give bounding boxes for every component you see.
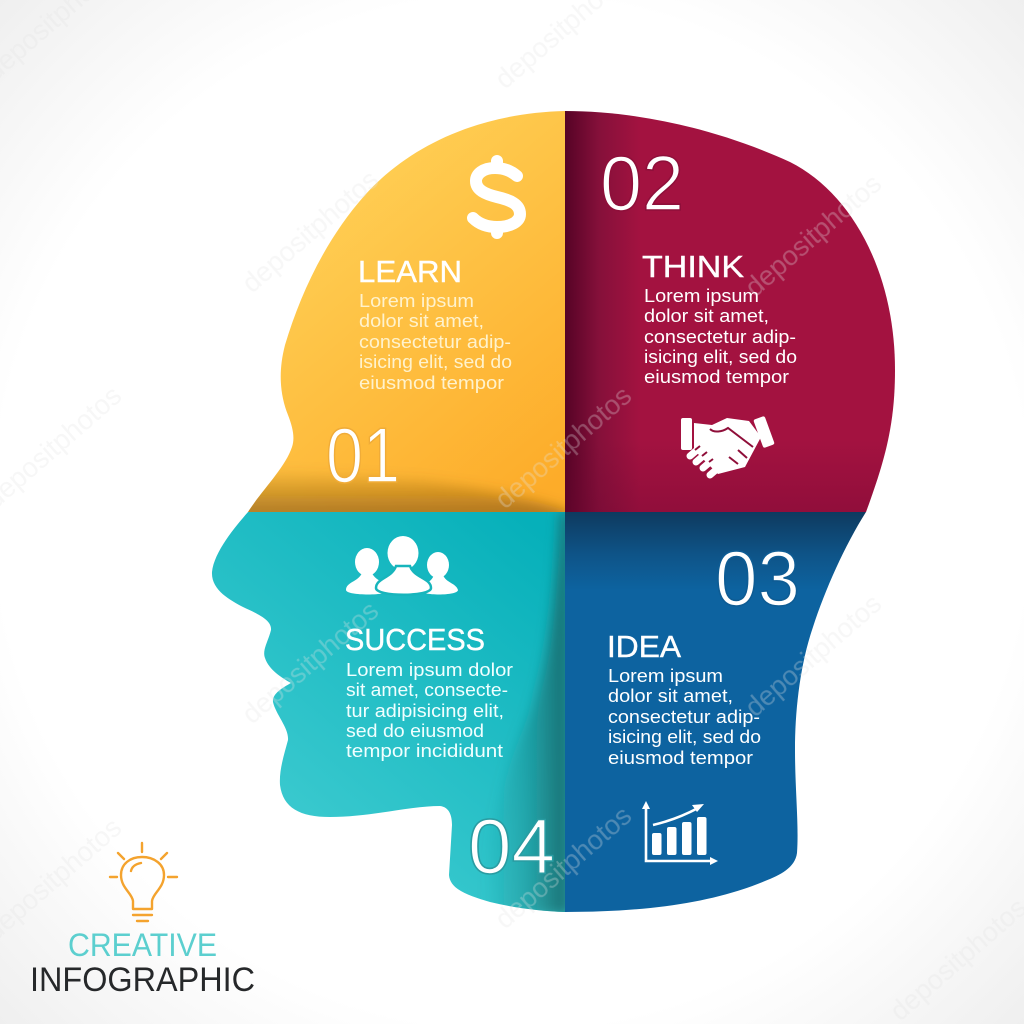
body text: learn: dolor sit amet, xyxy=(359,311,484,331)
heading: success: SUCCESS xyxy=(345,622,485,657)
yellow fill xyxy=(230,100,565,512)
crimson bottom shadow xyxy=(598,472,880,512)
number 02: 02 xyxy=(600,139,684,227)
section 04: success xyxy=(345,536,555,890)
teal fill xyxy=(205,512,565,914)
body text: learn: Lorem ipsum xyxy=(359,291,474,311)
body text: idea: eiusmod tempor xyxy=(608,748,753,768)
section 02: think xyxy=(600,139,797,475)
watermark 6: depositphotos xyxy=(739,588,887,723)
body text: success: tempor incididunt xyxy=(346,741,503,761)
watermark 4: depositphotos xyxy=(236,595,384,730)
watermark 2: depositphotos xyxy=(489,380,637,515)
number 03: 03 xyxy=(715,534,800,622)
text: creative: CREATIVE xyxy=(68,927,217,963)
icon: growth chart xyxy=(642,801,718,865)
body text: think: consectetur adip- xyxy=(644,327,796,347)
teal right shadow xyxy=(497,512,565,912)
heading: think: THINK xyxy=(642,249,744,284)
watermark 5: depositphotos xyxy=(489,800,637,935)
body text: think xyxy=(644,286,797,387)
body text: think: dolor sit amet, xyxy=(644,306,769,326)
body text: think: eiusmod tempor xyxy=(644,367,789,387)
icon: handshake xyxy=(681,416,775,475)
icon: group of people xyxy=(346,536,458,595)
body text: learn: consectetur adip- xyxy=(359,332,511,352)
heading: learn: LEARN xyxy=(358,254,462,289)
head infographic xyxy=(205,100,905,915)
icon: dollar sign xyxy=(473,161,520,233)
body text: think: isicing elit, sed do xyxy=(644,347,797,367)
body text: idea xyxy=(608,666,761,768)
body text: learn: eiusmod tempor xyxy=(359,373,504,393)
body text: success: Lorem ipsum dolor xyxy=(346,660,513,680)
body text: learn: isicing elit, sed do xyxy=(359,352,512,372)
body text: think: Lorem ipsum xyxy=(644,286,759,306)
yellow bottom shadow xyxy=(248,472,565,512)
crimson fill xyxy=(565,100,905,512)
watermark 3: depositphotos xyxy=(739,168,887,303)
body text: idea: isicing elit, sed do xyxy=(608,727,761,747)
body text: idea: consectetur adip- xyxy=(608,707,760,727)
body text: success: sit amet, consecte- xyxy=(346,680,508,700)
number 01: 01 xyxy=(326,411,400,499)
body text: success xyxy=(346,660,513,761)
panel: success (teal) xyxy=(205,512,570,915)
watermark 1: depositphotos xyxy=(236,164,384,299)
text: infographic: INFOGRAPHIC xyxy=(30,961,255,999)
panel: think (crimson) xyxy=(565,100,905,512)
heading: idea: IDEA xyxy=(607,629,681,664)
body text: success: sed do eiusmod xyxy=(346,721,484,741)
body text: learn xyxy=(359,291,512,393)
panel: idea (blue) xyxy=(565,512,875,914)
section 03: idea xyxy=(607,534,800,865)
logo: creative infographic xyxy=(30,843,255,999)
number 04: 04 xyxy=(468,802,555,890)
body text: success: tur adipisicing elit, xyxy=(346,701,504,721)
blue fill xyxy=(565,512,875,914)
body text: idea: dolor sit amet, xyxy=(608,686,733,706)
section 01: learn xyxy=(326,161,520,499)
panel: learn (yellow) xyxy=(248,111,565,512)
body text: idea: Lorem ipsum xyxy=(608,666,723,686)
icon: light bulb xyxy=(110,843,177,921)
